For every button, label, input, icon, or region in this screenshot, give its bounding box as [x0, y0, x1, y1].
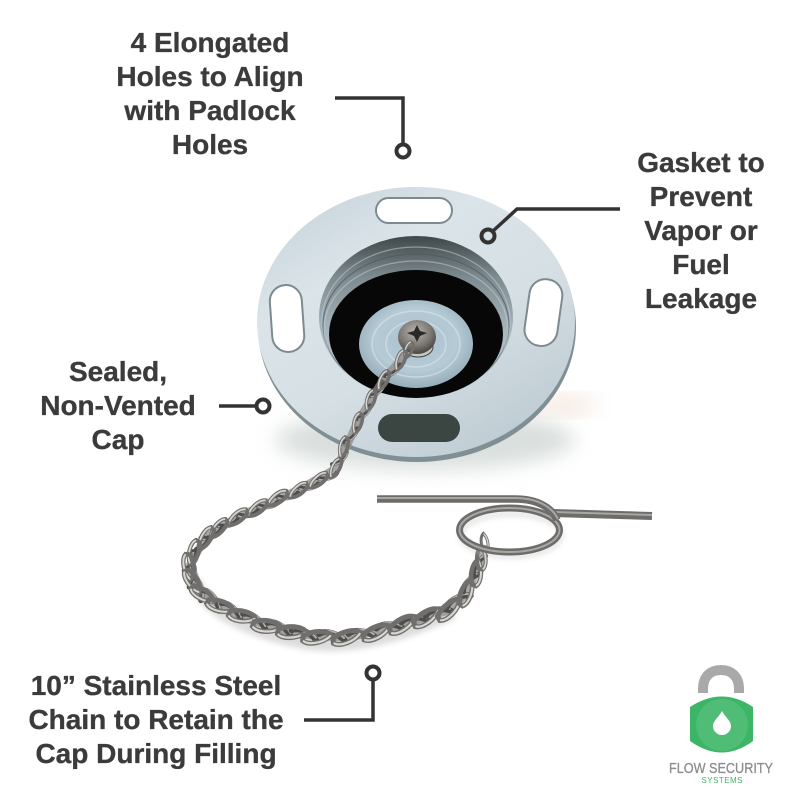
leader dot: [396, 144, 410, 158]
threaded opening: [319, 236, 513, 398]
cotter pin: [377, 498, 652, 556]
pin ring: [460, 508, 560, 552]
label text: Vapor or: [644, 215, 758, 246]
label text: Holes: [172, 129, 248, 160]
padlock body: [690, 696, 753, 752]
leader line: [335, 98, 403, 144]
bottom elongated hole: [378, 414, 460, 442]
logo wordmark: FLOW SECURITY: [669, 760, 773, 777]
black gasket: [329, 270, 503, 398]
label text: Fuel: [672, 249, 730, 280]
logo subtitle: SYSTEMS: [702, 776, 742, 785]
ring shadow: [461, 514, 561, 556]
plate shadow: [275, 396, 597, 470]
leader dot: [366, 666, 380, 680]
water drop: [713, 711, 731, 735]
left elongated hole: [269, 284, 305, 353]
machined centre disc: [359, 300, 473, 388]
plate rim: [258, 192, 576, 462]
callout: gasket: [482, 147, 765, 314]
logo: Flow Security Systems: [669, 670, 773, 785]
retaining chain: [182, 341, 489, 645]
ring highlight: [460, 508, 560, 552]
under links: [184, 362, 485, 641]
cap photo: [257, 187, 597, 470]
leader line: [304, 680, 373, 720]
leader line: [493, 209, 620, 231]
label text: Holes to Align: [116, 61, 304, 92]
label text: Cap: [92, 424, 144, 455]
upper pin bar: [377, 499, 557, 520]
callout: elongated holes: [116, 27, 410, 160]
lower pin bar highlight: [553, 512, 652, 515]
callout: sealed cap: [40, 356, 270, 455]
leader dot: [482, 230, 494, 242]
label text: 4 Elongated: [131, 27, 289, 58]
label text: Sealed,: [69, 356, 167, 387]
label text: 10” Stainless Steel: [31, 670, 281, 701]
screw head: [398, 320, 436, 357]
top elongated hole: [376, 198, 452, 223]
metal plate: [257, 187, 575, 457]
label text: Non-Vented: [40, 390, 196, 421]
padlock inner circle: [696, 699, 748, 751]
label text: with Padlock: [123, 95, 296, 126]
chain soft shadow: [193, 580, 453, 644]
right elongated hole: [522, 277, 564, 348]
leader dot: [256, 400, 270, 412]
chain core: [190, 352, 485, 638]
label text: Leakage: [645, 283, 757, 314]
top links: [182, 341, 489, 645]
label text: Cap During Filling: [35, 738, 277, 769]
leader line: [219, 404, 256, 408]
callout: chain: [28, 666, 380, 769]
upper pin bar highlight: [377, 498, 558, 519]
label text: Chain to Retain the: [28, 704, 284, 735]
lower pin bar: [553, 513, 652, 516]
padlock shackle: [703, 670, 739, 693]
label text: Gasket to: [637, 147, 765, 178]
label text: Prevent: [650, 181, 752, 212]
